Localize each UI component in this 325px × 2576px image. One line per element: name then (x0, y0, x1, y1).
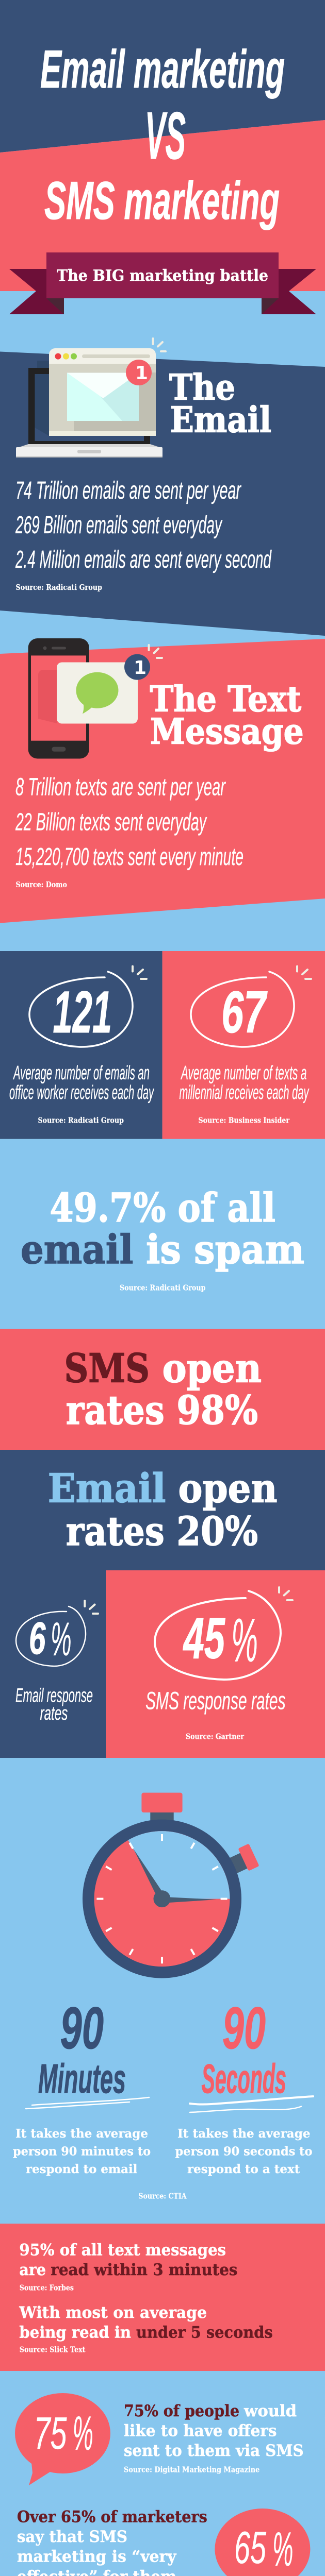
number: 90: 90 (60, 1995, 104, 2061)
heading: The Text Message: The Text (150, 679, 302, 720)
text block: read within 3 minutes: 95% of all text messages (19, 2241, 226, 2260)
speech bubble: 75%: 75 (34, 2408, 67, 2459)
heading: 49.7% of all: 49.7% of all (50, 1185, 275, 1231)
heading: rates 98%: rates 98% (66, 1387, 258, 1434)
ribbon text: The BIG marketing battle (57, 267, 268, 285)
text block: 90 minutes description: respond to email (26, 2162, 138, 2176)
source: Slick Text: Source: Slick Text (20, 2345, 86, 2354)
panel: SMS response rates (106, 1570, 325, 1758)
text block: text stats (15, 774, 243, 871)
text block: 90 minutes description (13, 2127, 151, 2176)
heading: rates 20%: rates 20% (66, 1509, 258, 1555)
source: Source: Digital Marketing Magazine (124, 2466, 259, 2475)
panel: SMS open rates (0, 1329, 325, 1450)
panel: average emails (0, 951, 163, 1139)
text block: offers via SMS: 75% of people (124, 2402, 239, 2420)
panel: average texts (163, 951, 325, 1139)
stat: email response rate: 6 (29, 1613, 46, 1664)
text block: 90 minutes description: person 90 minutes to (13, 2144, 151, 2158)
underline second stroke (190, 2106, 301, 2112)
text block: offers via SMS: like to have offers (124, 2421, 277, 2440)
text block: marketers: marketing is “very (17, 2547, 176, 2566)
panel: 90 seconds (175, 1995, 313, 2176)
icon: phone with message (28, 638, 162, 758)
heading: SMS open: SMS (64, 1346, 150, 1392)
heading: The Text Message (150, 679, 304, 753)
speech bubble: 65%: 65 (234, 2522, 267, 2573)
stat: SMS response rate: % (231, 1606, 258, 1675)
panel: read times (0, 2224, 325, 2371)
caption: emails per day (9, 1062, 154, 1104)
panel: email open rates (0, 1450, 325, 1758)
text block: read within 3 minutes (19, 2241, 237, 2279)
panel: the text message (0, 638, 325, 923)
text block: under 5 seconds (19, 2303, 273, 2342)
icon: notification badge: 1 (134, 657, 147, 679)
ribbon banner (9, 252, 316, 314)
caption: email response rates: Email response (15, 1685, 93, 1707)
heading: The Email: Email (170, 400, 271, 441)
underline (190, 2096, 313, 2104)
source: Domo: Source: Domo (15, 880, 67, 889)
text block: offers via SMS: would (243, 2402, 297, 2420)
panel: the email (0, 338, 325, 636)
source: Source: Radicati Group (120, 1284, 205, 1292)
caption: emails per day: office worker receives each day (9, 1082, 154, 1104)
text block: marketers: Over 65% of marketers (17, 2508, 207, 2527)
heading: Email open: open (178, 1466, 278, 1512)
stat: SMS response rate: 45 (183, 1606, 225, 1671)
heading: email is spam (21, 1227, 304, 1273)
speech bubble: 65% (215, 2509, 310, 2576)
heading: Email open: Email (48, 1466, 166, 1512)
underline (26, 2097, 149, 2109)
hand-drawn circle (29, 972, 133, 1047)
hand-drawn circle (191, 972, 294, 1047)
speech bubble: 75%: % (73, 2406, 93, 2460)
text block: under 5 seconds: under 5 seconds (136, 2324, 273, 2342)
panel: 90 minutes (13, 1995, 151, 2176)
text block: read within 3 minutes: are (19, 2261, 46, 2279)
caption: email response rates (15, 1685, 93, 1724)
text block: under 5 seconds: being read in (19, 2324, 131, 2342)
stat: email response rate: % (51, 1613, 72, 1666)
panel: 75 percent (15, 2393, 304, 2485)
icon: notification badge (126, 360, 152, 385)
icon: notification badge (124, 654, 150, 680)
panel: header (0, 0, 325, 314)
speech bubble: 65%: % (272, 2522, 293, 2576)
panel: spam stat (21, 1185, 304, 1292)
stat: email response rate (16, 1601, 98, 1666)
source: Forbes: Source: Forbes (20, 2284, 74, 2293)
heading: email is spam: email (21, 1227, 133, 1273)
source: Radicati Group: Source: Radicati Group (15, 583, 102, 592)
text block: 90 seconds description: It takes the average (177, 2127, 311, 2141)
source: Source: Business Insider (198, 1116, 289, 1125)
stat: SMS response rate (155, 1587, 293, 1680)
label: Minutes: Minutes (38, 2056, 126, 2102)
heading: email is spam: is spam (146, 1227, 304, 1273)
text block: 90 seconds description: respond to a text (187, 2162, 300, 2176)
icon: notification badge: 1 (135, 363, 148, 384)
caption: emails per day: Average number of emails an (13, 1062, 150, 1084)
heading: The Email: The (169, 367, 235, 408)
heading: SMS open: open (163, 1346, 262, 1392)
text block: 90 seconds description (175, 2127, 313, 2176)
speech bubble: 75% (15, 2393, 110, 2485)
icon: laptop with email window (16, 338, 166, 457)
icon: stopwatch (83, 1793, 259, 1978)
caption: email response rates: rates (40, 1703, 68, 1724)
text block: 90 minutes description: It takes the average (15, 2127, 148, 2141)
text block: email stats (15, 477, 272, 573)
source: CTIA: Source: CTIA (138, 2192, 187, 2201)
number: 121: 121 (53, 979, 112, 1045)
source: Source: Gartner (186, 1733, 244, 1741)
heading: The Text Message: Message (150, 711, 304, 753)
heading: The Email (169, 367, 271, 441)
text block: 90 seconds description: person 90 seconds to (175, 2144, 313, 2158)
text block: read within 3 minutes: read within 3 minutes (51, 2261, 237, 2279)
caption: texts per day (180, 1062, 310, 1104)
heading: Email open (48, 1466, 278, 1512)
text block: marketers (17, 2508, 207, 2576)
panel: 65 percent (17, 2508, 310, 2576)
text block: under 5 seconds: With most on average (19, 2303, 207, 2322)
number: 90: 90 (222, 1995, 266, 2061)
text block: offers via SMS: sent to them via SMS (124, 2442, 304, 2460)
text block: offers via SMS (124, 2402, 304, 2460)
heading: SMS open (64, 1346, 262, 1392)
number: 67: 67 (221, 979, 268, 1045)
panel: header: VS (145, 98, 186, 173)
text block: marketers: say that SMS (17, 2528, 127, 2546)
source: Source: Radicati Group (38, 1116, 124, 1125)
